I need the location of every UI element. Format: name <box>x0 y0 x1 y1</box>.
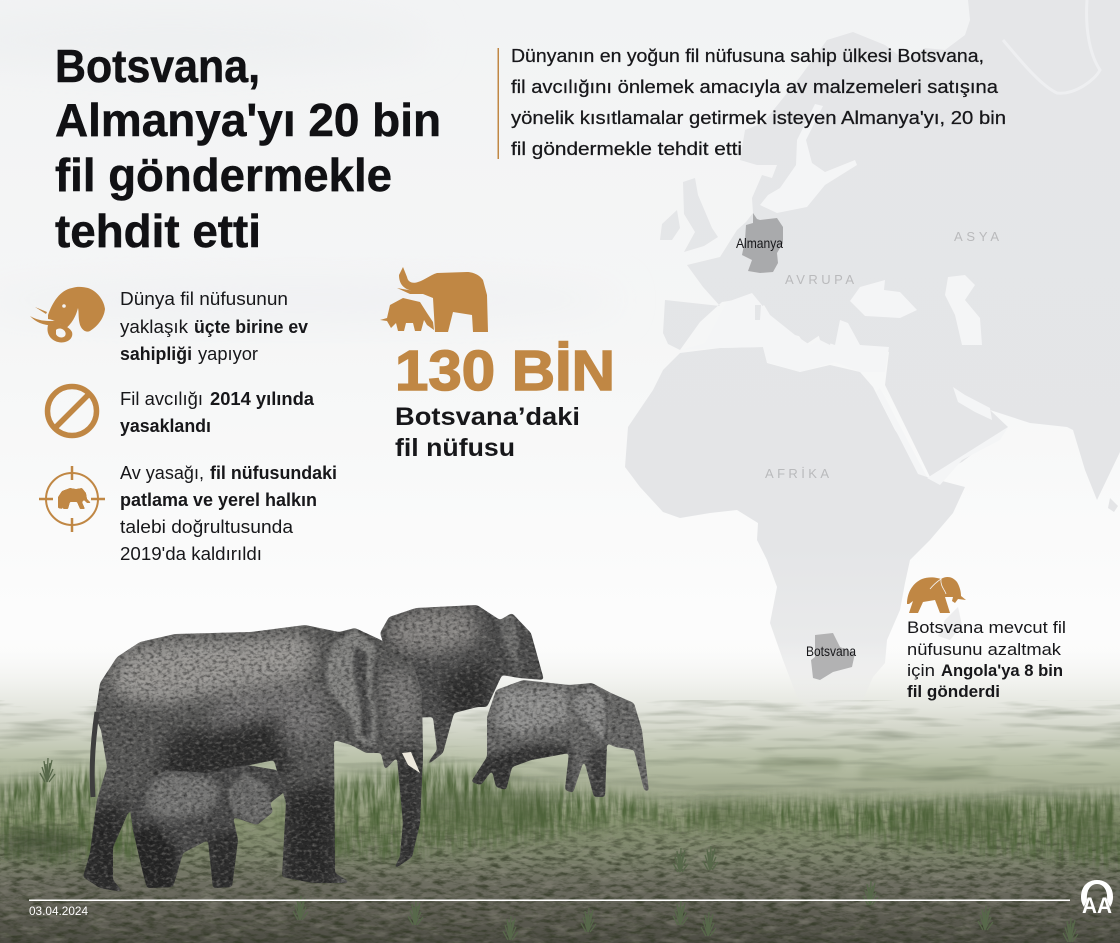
map: Italy and Greece <box>755 287 835 345</box>
title: Almanya'yı 20 bin <box>55 94 441 146</box>
map: Great Britain <box>683 178 718 252</box>
elephant: suckling calf <box>130 765 284 888</box>
stat: 130 BİN: Botsvana’daki <box>395 403 580 431</box>
callout: Angola transfer: fil gönderdi <box>907 683 1000 701</box>
continent labels: AFRİKA <box>765 466 829 481</box>
grass band: centre meadow <box>280 765 660 858</box>
map: seas and lakes <box>680 0 1100 485</box>
highlighted country: Botswana: Botsvana <box>806 643 856 659</box>
stat: 130 BİN <box>395 339 615 462</box>
callout: Angola transfer <box>907 619 1066 701</box>
text: ban lifted 2019: fil nüfusundaki <box>210 463 337 483</box>
continent labels: AVRUPA <box>785 272 854 287</box>
text: ban lifted 2019: Av yasağı, <box>120 463 204 483</box>
title: fil göndermekle <box>55 149 392 201</box>
grass band: left meadow <box>0 770 140 862</box>
world map background <box>625 0 1120 717</box>
map: Madagascar <box>938 607 962 640</box>
photo: elephant herd <box>80 600 655 900</box>
map: Ireland <box>660 210 680 240</box>
logo: AA: AA <box>1082 893 1112 918</box>
icon: adult elephant and baby <box>380 267 488 332</box>
continent labels: ASYA <box>954 229 999 244</box>
grass tufts <box>40 758 1078 942</box>
intro text with rule: Dünyanın en yoğun fil nüfusuna sahip ülkesi Botsvana, <box>511 45 984 66</box>
text: population share: yaklaşık <box>120 317 189 337</box>
title: tehdit etti <box>55 205 261 257</box>
text: hunting ban 2014: yasaklandı <box>120 416 211 436</box>
grass band: right meadow <box>640 795 1120 868</box>
elephant: young at right <box>472 680 648 797</box>
callout: Angola transfer: Angola'ya 8 bin <box>941 662 1063 680</box>
logo: AA <box>1081 880 1113 918</box>
map: Eurasia landmass <box>663 0 1120 500</box>
footer rule <box>29 900 1070 901</box>
savanna ground <box>0 650 1120 943</box>
title: Botsvana, <box>55 40 260 92</box>
text: population share <box>120 289 308 364</box>
date: 03.04.2024 <box>29 906 89 918</box>
title <box>55 40 441 257</box>
map: Africa <box>625 347 965 717</box>
text: population share: yapıyor <box>198 344 258 364</box>
intro text with rule <box>498 45 1006 159</box>
text: hunting ban 2014: Fil avcılığı <box>120 389 203 409</box>
icon: small elephant <box>907 577 966 613</box>
icon: prohibition sign <box>48 386 96 436</box>
text: ban lifted 2019: talebi doğrultusunda <box>120 517 294 537</box>
text: hunting ban 2014 <box>120 389 315 436</box>
intro text with rule: fil göndermekle tehdit etti <box>511 138 742 159</box>
text: population share: üçte birine ev <box>194 317 308 337</box>
text: ban lifted 2019: 2019'da kaldırıldı <box>120 544 262 564</box>
intro text with rule: fil avcılığını önlemek amacıyla av malzemeleri satışına <box>511 76 999 97</box>
elephant: tusk <box>402 752 420 773</box>
text: population share: Dünya fil nüfusunun <box>120 289 288 309</box>
intro text with rule: yönelik kısıtlamalar getirmek isteyen Almanya'yı, 20 bin <box>511 107 1006 128</box>
highlighted country: Germany <box>736 213 783 273</box>
elephant: tail <box>92 712 97 797</box>
text: ban lifted 2019: patlama ve yerel halkın <box>120 490 317 510</box>
callout: Angola transfer: için <box>907 662 935 680</box>
elephant: tall adult <box>80 620 430 900</box>
highlighted country: Botswana <box>806 633 856 680</box>
icon: crosshair with elephant <box>39 466 105 532</box>
callout: Angola transfer: Botsvana mevcut fil <box>907 619 1066 637</box>
text: ban lifted 2019 <box>120 463 337 564</box>
icon: elephant head <box>30 287 105 342</box>
stat: 130 BİN: 130 BİN <box>395 339 615 403</box>
text: population share: sahipliği <box>120 344 192 364</box>
highlighted country: Germany: Almanya <box>736 235 783 251</box>
stat: 130 BİN: fil nüfusu <box>395 434 515 462</box>
map: Sri Lanka <box>1108 498 1118 512</box>
elephant: adult behind <box>380 605 544 763</box>
text: hunting ban 2014: 2014 yılında <box>210 389 315 409</box>
callout: Angola transfer: nüfusunu azaltmak <box>907 641 1062 659</box>
continent labels <box>765 229 999 481</box>
